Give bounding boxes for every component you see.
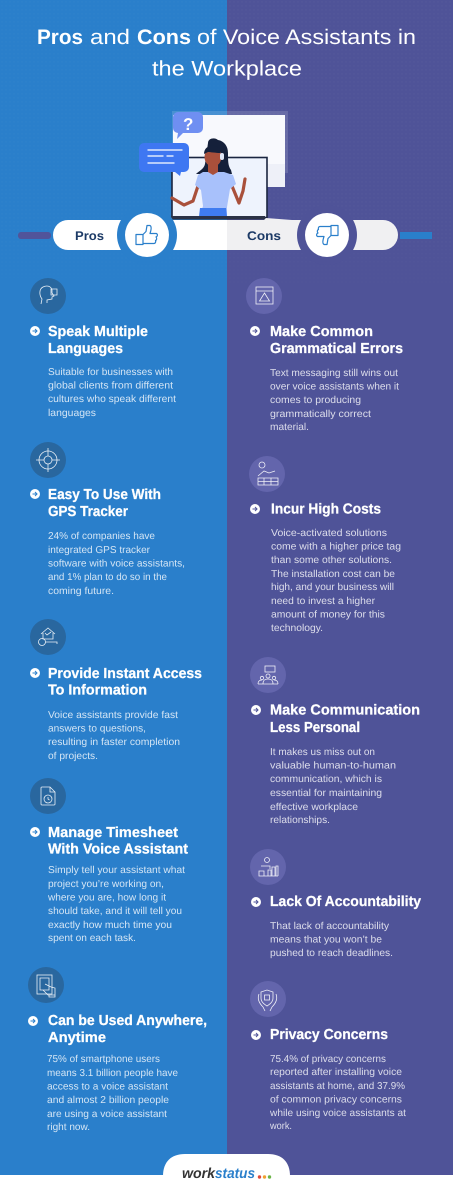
body text bbox=[271, 528, 401, 634]
logo: workstatus: status bbox=[215, 1166, 255, 1182]
panel: pro 3 instant access bbox=[30, 619, 202, 762]
body text: spent on each task. bbox=[48, 933, 136, 944]
body text bbox=[270, 921, 393, 959]
heading bbox=[270, 702, 420, 736]
icon: hands holding shield bbox=[250, 981, 286, 1017]
body text: Text messaging still wins out bbox=[270, 368, 398, 379]
body text: assistants at home, and 37.9% bbox=[270, 1081, 405, 1092]
heading: Can be Used Anywhere, bbox=[48, 1013, 207, 1029]
icon: timesheet document bbox=[30, 778, 66, 814]
footer: white band with logo tab bbox=[0, 1154, 453, 1200]
bullet bbox=[30, 668, 40, 678]
heading: Grammatical Errors bbox=[270, 341, 403, 357]
body text bbox=[270, 747, 396, 826]
body text: cultures who speak different bbox=[48, 394, 176, 405]
icon: house and key bbox=[30, 619, 66, 655]
body text: of common privacy concerns bbox=[270, 1094, 402, 1106]
body text: Voice assistants provide fast bbox=[48, 710, 178, 721]
heading: Languages bbox=[48, 341, 123, 357]
logo: workstatus: work bbox=[182, 1166, 216, 1182]
heading: Incur High Costs bbox=[271, 502, 381, 518]
bullet bbox=[30, 326, 40, 336]
heading: Easy To Use With bbox=[48, 487, 161, 503]
body text: high, and your business will bbox=[271, 582, 394, 593]
heading: Privacy Concerns bbox=[270, 1027, 388, 1043]
body text: exactly how much time you bbox=[48, 920, 172, 931]
icon: costs chart bbox=[249, 456, 285, 492]
body text: and almost 2 billion people bbox=[47, 1095, 169, 1106]
icon: tablet and hand bbox=[28, 967, 64, 1003]
body text bbox=[48, 531, 185, 597]
illustration: woman with headset on laptop: ? bbox=[183, 115, 193, 134]
body text: material. bbox=[270, 422, 309, 433]
heading: Provide Instant Access bbox=[48, 666, 202, 682]
body text: The installation cost can be bbox=[271, 569, 395, 580]
background: cons side bbox=[227, 0, 453, 1175]
heading bbox=[48, 324, 148, 357]
body text: global clients from different bbox=[48, 380, 173, 392]
body text: It makes us miss out on bbox=[270, 747, 375, 758]
panel: con 3 less personal bbox=[250, 657, 420, 826]
bullet bbox=[30, 489, 40, 499]
label: pros: Pros bbox=[75, 229, 104, 243]
body text: while using voice assistants at bbox=[269, 1108, 406, 1119]
panel: con 1 grammatical errors bbox=[246, 278, 403, 433]
icon: speaking head bbox=[30, 278, 66, 314]
body text: software with voice assistants, bbox=[48, 558, 185, 570]
body text: integrated GPS tracker bbox=[48, 545, 151, 556]
body text: work. bbox=[269, 1121, 292, 1132]
heading: Less Personal bbox=[270, 720, 360, 736]
heading: Anytime bbox=[48, 1030, 106, 1046]
body text: That lack of accountability bbox=[270, 921, 389, 932]
bullet bbox=[28, 1016, 38, 1026]
illustration: woman with headset on laptop bbox=[139, 111, 288, 220]
body text: pushed to reach deadlines. bbox=[270, 948, 393, 959]
dash: right accent bbox=[400, 232, 432, 239]
body text: coming future. bbox=[48, 586, 114, 597]
body text: technology. bbox=[271, 623, 323, 634]
bullet bbox=[251, 1030, 261, 1040]
body text: come with a higher price tag bbox=[271, 542, 401, 552]
heading bbox=[270, 324, 403, 357]
heading: To Information bbox=[48, 682, 147, 698]
body text: comes to producing bbox=[270, 395, 361, 406]
body text: languages bbox=[48, 408, 96, 419]
body text: amount of money for this bbox=[271, 610, 385, 620]
panel: pro 4 manage timesheet bbox=[30, 778, 188, 944]
banner: pros and cons bar bbox=[18, 205, 432, 265]
ring and thumbs down icon bbox=[297, 205, 357, 265]
body text: reported after installing voice bbox=[270, 1067, 402, 1078]
panel: con 5 privacy bbox=[250, 981, 406, 1132]
heading bbox=[48, 487, 161, 520]
panel: pro 1 speak multiple languages bbox=[30, 278, 176, 419]
body text: communication, which is bbox=[270, 774, 382, 785]
body text: where you are, how long it bbox=[47, 892, 166, 904]
panel: pro 5 anywhere anytime bbox=[28, 967, 207, 1133]
body text: means that you won’t be bbox=[270, 934, 382, 946]
dash: left accent bbox=[18, 232, 51, 239]
body text: than some other solutions. bbox=[271, 555, 392, 566]
ring and thumbs up icon bbox=[117, 205, 177, 265]
body text: 75% of smartphone users bbox=[47, 1054, 160, 1065]
body text: means 3.1 billion people have bbox=[47, 1068, 178, 1079]
panel: con 4 accountability bbox=[250, 849, 421, 959]
heading bbox=[48, 666, 202, 698]
body text: over voice assistants when it bbox=[270, 382, 399, 392]
body text: of projects. bbox=[48, 751, 98, 762]
body text: 24% of companies have bbox=[48, 531, 155, 542]
heading: GPS Tracker bbox=[48, 504, 128, 520]
body text: project you’re working on, bbox=[48, 879, 164, 890]
bullet bbox=[250, 326, 260, 336]
heading bbox=[48, 1013, 207, 1046]
heading: With Voice Assistant bbox=[48, 842, 188, 858]
body text: effective workplace bbox=[270, 802, 358, 813]
body text: 75.4% of privacy concerns bbox=[270, 1054, 386, 1065]
body text: valuable human-to-human bbox=[270, 760, 396, 772]
body text: are using a voice assistant bbox=[47, 1109, 167, 1120]
body text: access to a voice assistant bbox=[47, 1082, 168, 1092]
body text: right now. bbox=[47, 1122, 90, 1133]
icon: group with speech bubble bbox=[250, 657, 286, 693]
heading: Manage Timesheet bbox=[48, 825, 178, 841]
body text: resulting in faster completion bbox=[48, 737, 180, 748]
body text: and 1% plan to do so in the bbox=[48, 572, 167, 583]
panel: con 2 high costs bbox=[249, 456, 401, 634]
title: of Voice Assistants in bbox=[197, 26, 416, 49]
heading: Speak Multiple bbox=[48, 324, 148, 340]
body text: need to invest a higher bbox=[271, 596, 376, 607]
heading: Make Common bbox=[270, 324, 373, 340]
heading: Lack Of Accountability bbox=[270, 894, 421, 910]
icon: browser warning bbox=[246, 278, 282, 314]
icon: target bbox=[30, 442, 66, 478]
body text bbox=[47, 1054, 178, 1133]
bullet bbox=[251, 705, 261, 715]
body text: Voice-activated solutions bbox=[271, 528, 387, 539]
body text: grammatically correct bbox=[270, 409, 371, 420]
body text: Simply tell your assistant what bbox=[48, 865, 185, 876]
body text bbox=[269, 1054, 406, 1132]
title: Pros bbox=[37, 26, 83, 49]
body text: Suitable for businesses with bbox=[48, 367, 173, 378]
body text: relationships. bbox=[270, 815, 330, 826]
heading: Make Communication bbox=[270, 702, 420, 718]
heading bbox=[48, 825, 188, 858]
title bbox=[37, 26, 416, 80]
title: the Workplace bbox=[152, 58, 302, 80]
body text: should take, and it will tell you bbox=[48, 906, 182, 917]
bullet bbox=[250, 504, 260, 514]
body text bbox=[47, 865, 185, 944]
background: pros side bbox=[0, 0, 227, 1175]
body text: answers to questions, bbox=[48, 724, 146, 734]
title: and bbox=[90, 26, 130, 49]
body text bbox=[48, 710, 180, 762]
label: cons: Cons bbox=[247, 229, 281, 243]
logo: workstatus bbox=[182, 1166, 271, 1182]
bullet bbox=[251, 897, 261, 907]
bullet bbox=[30, 827, 40, 837]
body text bbox=[48, 367, 176, 419]
panel: pro 2 easy to use bbox=[30, 442, 185, 597]
body text: essential for maintaining bbox=[270, 788, 382, 799]
icon: person and bar chart bbox=[250, 849, 286, 885]
body text bbox=[270, 368, 399, 433]
title: Cons bbox=[137, 26, 191, 49]
